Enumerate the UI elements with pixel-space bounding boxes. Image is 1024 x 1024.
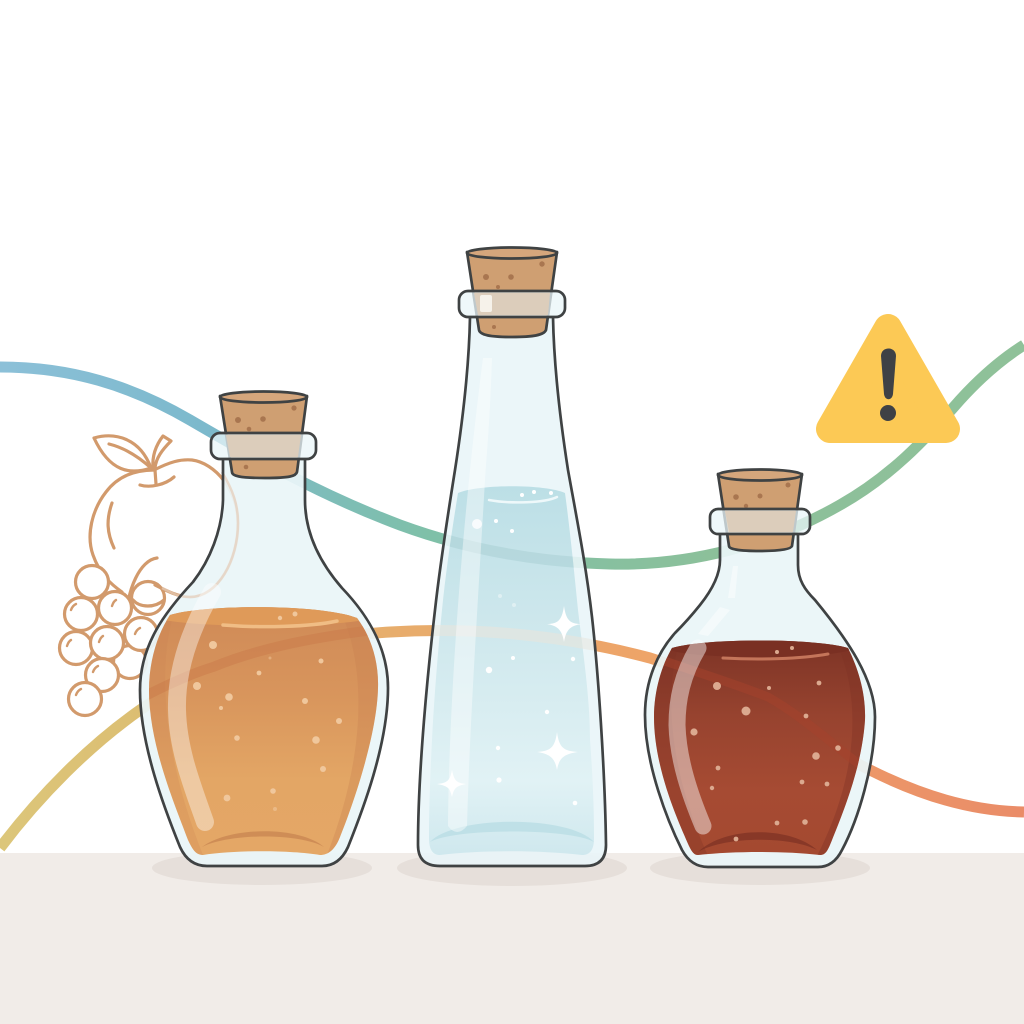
illustration: three vinegar bottles [0, 246, 1024, 1024]
glass body [418, 317, 606, 866]
glass body [140, 458, 388, 866]
surface highlight [723, 654, 828, 659]
water shading [430, 536, 594, 842]
bottle shadow: right [650, 851, 870, 885]
glass collar [459, 291, 565, 317]
red liquid [654, 640, 865, 855]
cork [220, 396, 307, 478]
floor [0, 853, 1024, 1024]
glass highlight [177, 592, 212, 822]
water [429, 486, 594, 855]
collar glint [480, 295, 492, 312]
glass outline [140, 458, 388, 866]
liquid shading [149, 607, 378, 855]
right bottle: red vinegar [645, 470, 875, 867]
bottle shadow: middle [397, 850, 627, 886]
bubbles [193, 612, 342, 811]
amber liquid [149, 607, 378, 855]
glass outline [645, 534, 875, 867]
surface highlight [489, 497, 557, 502]
glass highlight [448, 358, 492, 832]
liquid shading [650, 639, 870, 860]
left bottle: amber vinegar [130, 392, 390, 866]
glass collar [211, 433, 316, 459]
surface highlight [223, 621, 337, 627]
trend line: warm yellow to coral [0, 630, 1024, 848]
glass collar [710, 509, 810, 534]
middle bottle: clear vinegar [416, 246, 608, 868]
glass outline [418, 317, 606, 866]
trend line: cool blue to green [0, 345, 1024, 564]
bubbles and sparkles [437, 490, 581, 805]
bottle shadow: left [152, 851, 372, 885]
neck glints [698, 566, 738, 636]
glass body [645, 534, 875, 867]
faint apple seen through glass [162, 472, 238, 597]
cork [467, 252, 557, 337]
bubbles [690, 646, 841, 841]
icon: warning triangle [830, 328, 946, 429]
cork [718, 474, 802, 551]
icon: apple and grapes outline [60, 436, 238, 716]
glass highlight [677, 648, 703, 826]
